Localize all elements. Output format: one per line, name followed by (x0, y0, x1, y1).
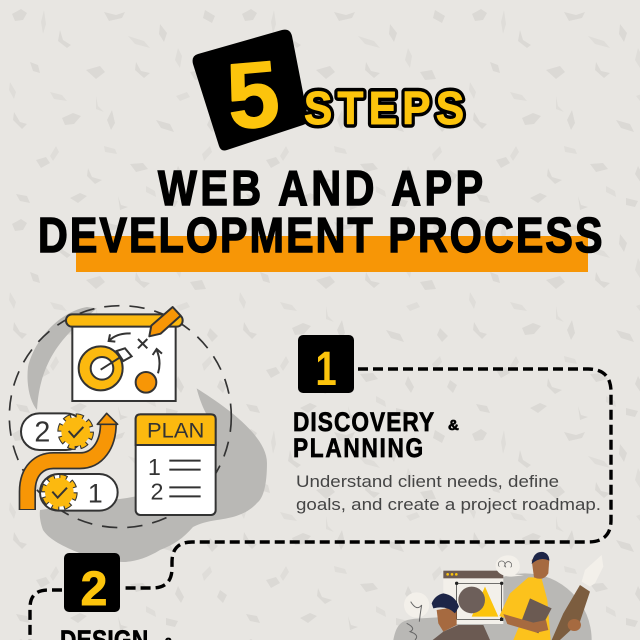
badge: 5 steps (193, 30, 464, 151)
plan card: 2 (150, 479, 163, 505)
black tilted square (193, 30, 308, 151)
pill 1 with gear: 1 (88, 478, 103, 508)
dashed circle (9, 306, 231, 528)
step 1 badge: 1 (315, 343, 337, 396)
step 1 badge (298, 335, 354, 396)
pill 1 with gear (40, 474, 118, 511)
illustration: designers (393, 552, 603, 640)
grey blob (27, 307, 267, 562)
giant pen (552, 555, 603, 640)
pill 2 with gear: 2 (34, 417, 50, 449)
step 1 description: Understand client needs, define (296, 472, 559, 491)
step 2 badge (64, 553, 120, 616)
standing man (499, 552, 552, 640)
step 2 badge: 2 (81, 563, 107, 616)
title: WEB AND APP (158, 161, 483, 216)
plan card: 1 (148, 454, 161, 480)
seated man (432, 593, 490, 640)
word STEPS: STEPS (304, 83, 464, 134)
pill 2 with gear (21, 413, 90, 450)
word STEPS: STEPS (304, 83, 464, 134)
illustration: planning (9, 306, 267, 562)
speech bubble (496, 555, 524, 577)
step 1 heading: & (448, 417, 459, 434)
step 1 heading (293, 407, 459, 463)
plan card (136, 414, 216, 515)
number 5: 5 (223, 41, 283, 149)
step 1 heading: PLANNING (293, 433, 423, 463)
orange highlight bar (76, 236, 588, 272)
grey shapes (393, 573, 592, 640)
title (38, 161, 602, 263)
plan card: PLAN (147, 418, 204, 442)
step 1 heading: DISCOVERY (293, 407, 434, 437)
title: DEVELOPMENT PROCESS (38, 208, 602, 263)
design window (443, 571, 503, 624)
step 1 description: goals, and create a project roadmap. (296, 495, 601, 514)
orange arrow (27, 413, 118, 510)
presentation board (66, 307, 183, 401)
curl sketch (404, 592, 429, 640)
dashed connector (30, 369, 611, 640)
step 1 description (296, 472, 601, 514)
